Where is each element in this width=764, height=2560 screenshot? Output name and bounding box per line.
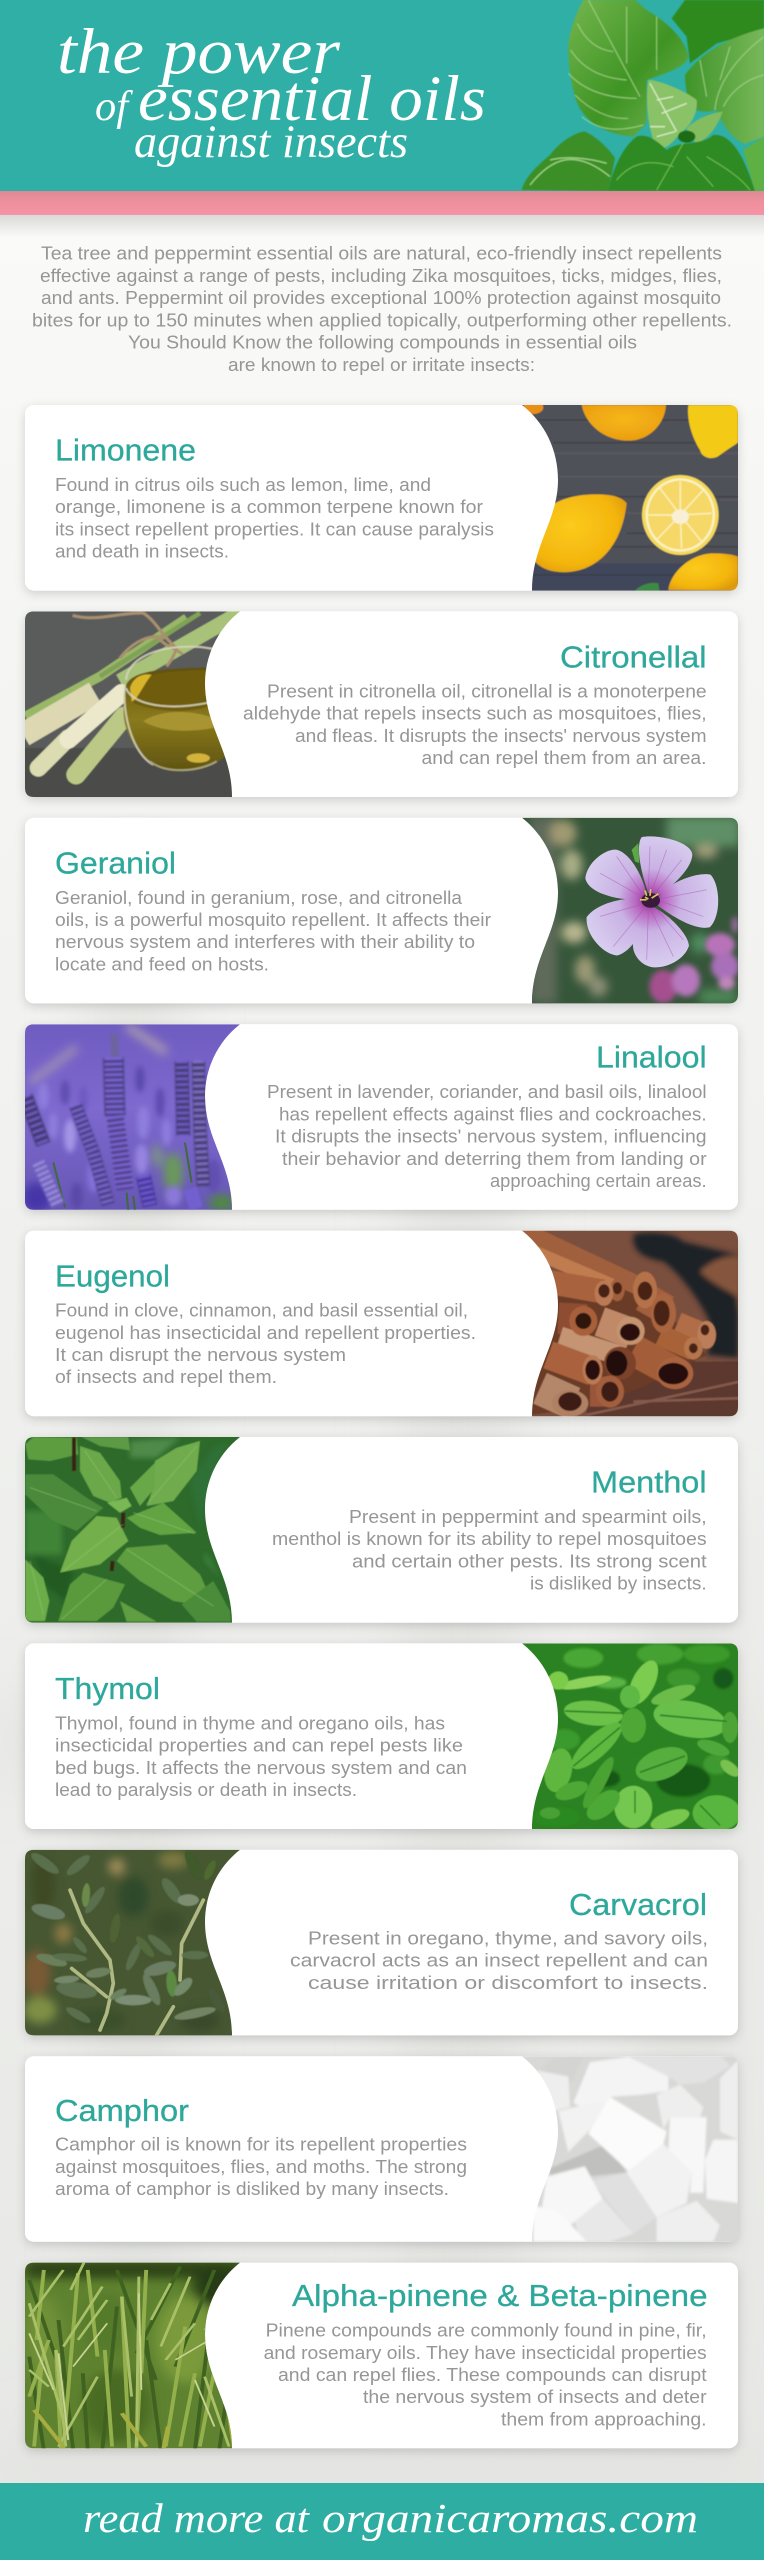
description: against mosquitoes, flies, and moths. The strong xyxy=(55,2157,467,2177)
panel: Thymol xyxy=(25,1642,764,1834)
heading: Alpha-pinene & Beta-pinene xyxy=(292,2278,708,2313)
description: Present in lavender, coriander, and basil oils, linalool xyxy=(267,1082,707,1102)
footer text: organicaromas.com xyxy=(322,2495,698,2541)
icon: mint leaves xyxy=(522,0,764,191)
intro text: and ants. Peppermint oil provides exceptional 100% protection against mosquito xyxy=(41,288,721,308)
heading: Thymol xyxy=(55,1671,160,1706)
panel: Citronellal xyxy=(23,610,738,800)
description: orange, limonene is a common terpene known for xyxy=(55,497,483,517)
photo: thyme sprigs xyxy=(23,1848,243,2038)
title xyxy=(57,16,486,168)
description: lead to paralysis or death in insects. xyxy=(55,1780,357,1800)
intro text xyxy=(32,244,732,375)
description: and death in insects. xyxy=(55,542,229,562)
photo: lemongrass and oil xyxy=(23,610,243,800)
intro text: are known to repel or irritate insects: xyxy=(228,355,535,375)
description: oils, is a powerful mosquito repellent. It affects their xyxy=(55,910,491,930)
description: Found in clove, cinnamon, and basil essential oil, xyxy=(55,1301,468,1321)
description: Camphor oil is known for its repellent properties xyxy=(55,2135,467,2155)
description: and can repel flies. These compounds can disrupt xyxy=(278,2365,707,2385)
photo: rosemary xyxy=(24,2260,244,2450)
pink band xyxy=(0,191,764,237)
description xyxy=(55,475,494,562)
intro text: Tea tree and peppermint essential oils are natural, eco-friendly insect repellents xyxy=(41,244,722,264)
description: Present in citronella oil, citronellal is a monoterpene xyxy=(267,681,707,701)
description: It disrupts the insects' nervous system, influencing xyxy=(275,1127,707,1147)
description: carvacrol acts as an insect repellent and can xyxy=(290,1951,708,1971)
description: aroma of camphor is disliked by many insects. xyxy=(55,2179,449,2199)
description: It can disrupt the nervous system xyxy=(55,1345,346,1365)
description: them from approaching. xyxy=(501,2409,707,2429)
title: against insects xyxy=(134,116,408,168)
intro text: effective against a range of pests, including Zika mosquitoes, ticks, midges, flies, xyxy=(40,266,722,286)
heading: Citronellal xyxy=(560,639,707,674)
description: cause irritation or discomfort to insects. xyxy=(308,1973,708,1993)
description xyxy=(55,1713,467,1800)
intro text: bites for up to 150 minutes when applied topically, outperforming other repellents. xyxy=(32,310,732,330)
photo: lemons on wood xyxy=(522,405,738,591)
panel: Carvacrol xyxy=(23,1848,738,2038)
description xyxy=(243,681,707,768)
description: menthol is known for its ability to repel mosquitoes xyxy=(272,1529,707,1549)
heading: Geraniol xyxy=(55,845,176,880)
photo: camphor cubes xyxy=(522,2056,738,2242)
description xyxy=(290,1928,708,1993)
photo: lavender field xyxy=(22,1023,243,1213)
photo: geranium flower xyxy=(522,818,738,1004)
heading: Camphor xyxy=(55,2093,189,2128)
panel: Menthol xyxy=(23,1434,738,1624)
description: the nervous system of insects and deter xyxy=(363,2387,707,2407)
title: of xyxy=(95,84,133,130)
photo: peppermint leaves xyxy=(23,1434,243,1624)
title: the power xyxy=(57,16,341,88)
heading: Menthol xyxy=(591,1465,707,1500)
description: is disliked by insects. xyxy=(530,1574,707,1594)
panel: Alpha-pinene and Beta-pinene xyxy=(24,2260,738,2450)
description: bed bugs. It affects the nervous system and can xyxy=(55,1758,467,1778)
description xyxy=(55,1301,476,1387)
heading: Limonene xyxy=(55,433,196,468)
description: Present in peppermint and spearmint oils, xyxy=(349,1507,707,1527)
description xyxy=(55,888,491,974)
description: Geraniol, found in geranium, rose, and citronella xyxy=(55,888,463,908)
heading: Linalool xyxy=(596,1040,707,1075)
description: nervous system and interferes with their ability to xyxy=(55,932,475,952)
description: has repellent effects against flies and cockroaches. xyxy=(279,1104,707,1124)
description xyxy=(272,1507,707,1594)
description: Pinene compounds are commonly found in pine, fir, xyxy=(266,2321,707,2341)
panel: Geraniol xyxy=(25,816,764,1005)
description: its insect repellent properties. It can cause paralysis xyxy=(55,519,494,539)
heading: Eugenol xyxy=(55,1258,170,1293)
description: insecticidal properties and can repel pests like xyxy=(55,1736,463,1756)
description: locate and feed on hosts. xyxy=(55,954,269,974)
description: Thymol, found in thyme and oregano oils, has xyxy=(55,1713,445,1733)
description: their behavior and deterring them from landing or xyxy=(282,1149,707,1169)
panel: Camphor xyxy=(25,2054,764,2246)
description: and certain other pests. Its strong scent xyxy=(352,1551,707,1571)
footer text: read more at xyxy=(83,2495,311,2541)
header banner xyxy=(0,0,764,191)
intro text: You Should Know the following compounds in essential oils xyxy=(128,333,637,353)
description xyxy=(267,1082,707,1191)
description: aldehyde that repels insects such as mosquitoes, flies, xyxy=(243,704,707,724)
title: essential oils xyxy=(138,63,486,135)
description: and rosemary oils. They have insecticidal properties xyxy=(264,2343,707,2363)
panel: Linalool xyxy=(22,1023,738,1213)
description: eugenol has insecticidal and repellent properties. xyxy=(55,1323,476,1343)
description: approaching certain areas. xyxy=(490,1171,707,1191)
description: and fleas. It disrupts the insects' nervous system xyxy=(295,726,707,746)
footer banner xyxy=(0,2483,764,2560)
description: Present in oregano, thyme, and savory oils, xyxy=(308,1928,708,1948)
panel: Eugenol xyxy=(25,1228,764,1418)
description xyxy=(264,2321,707,2429)
description: of insects and repel them. xyxy=(55,1367,277,1387)
description: Found in citrus oils such as lemon, lime, and xyxy=(55,475,431,495)
photo: cinnamon sticks xyxy=(522,1230,738,1416)
heading: Carvacrol xyxy=(569,1887,707,1922)
description: and can repel them from an area. xyxy=(422,748,706,768)
description xyxy=(55,2135,467,2199)
panel: Limonene xyxy=(25,401,764,593)
photo: oregano plant xyxy=(522,1643,738,1829)
footer text xyxy=(83,2495,698,2541)
